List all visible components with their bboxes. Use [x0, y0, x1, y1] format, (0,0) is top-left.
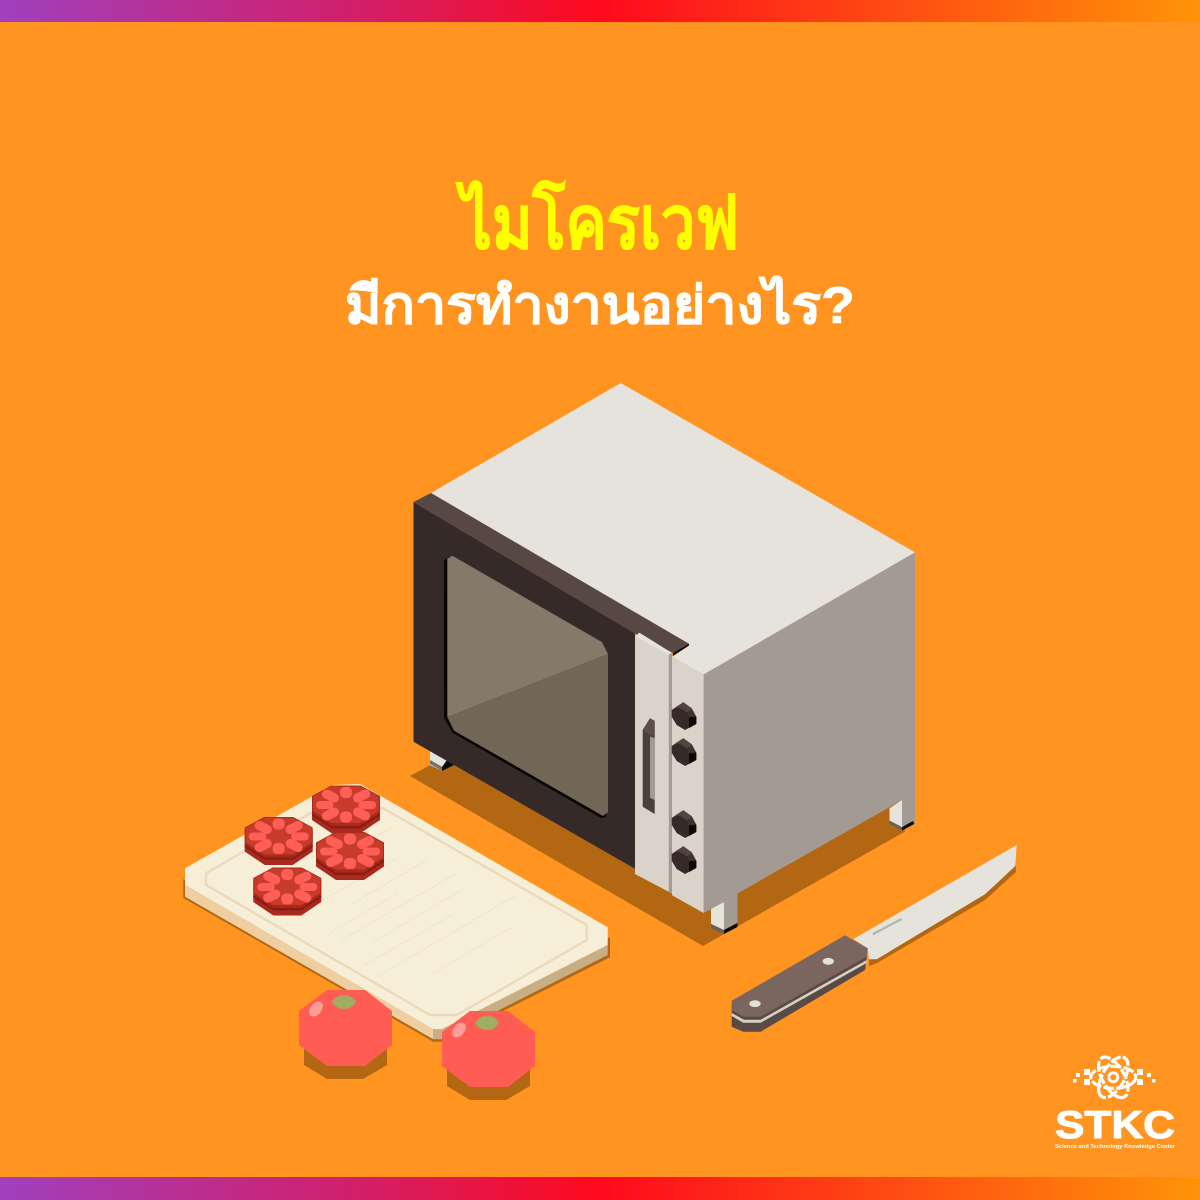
handle top [732, 935, 868, 1017]
slice 4 [253, 868, 321, 916]
board top [185, 784, 608, 1029]
knob 4 [672, 846, 696, 874]
handle lower side [732, 956, 867, 1032]
knob 2 [672, 738, 696, 766]
oven front dark frame [414, 502, 635, 869]
rivet 2 [749, 1000, 761, 1007]
STKC logo [1055, 1052, 1176, 1150]
board knife scratches [320, 827, 515, 976]
oven front foot [711, 893, 737, 934]
door edge [635, 633, 672, 894]
logo atom icon [1091, 1052, 1136, 1102]
tomato right [442, 1011, 535, 1100]
microwave oven [410, 383, 915, 946]
oven window [447, 556, 608, 816]
top gradient bar [0, 0, 1200, 22]
cutting board [183, 784, 610, 1042]
board shadow [183, 879, 610, 1042]
slice 3 [316, 832, 384, 880]
knife [732, 845, 1017, 1032]
blade shadow [869, 862, 1016, 966]
board left side [185, 885, 433, 1039]
oven top [431, 383, 915, 674]
blade [853, 845, 1017, 959]
control panel [672, 657, 704, 913]
oven side [704, 552, 915, 913]
window upper glass [447, 556, 608, 717]
tomato slices [245, 786, 384, 916]
board groove [206, 808, 587, 1015]
knob 3 [672, 810, 696, 838]
logo wordmark: STKC [1055, 1104, 1175, 1147]
title line 1: ไมโครเวฟ [455, 179, 739, 264]
bottom gradient bar [0, 1177, 1200, 1200]
title line 2: มีการทำงานอย่างไร? [345, 275, 855, 335]
oven floor shadow [410, 750, 905, 946]
knob 1 [672, 702, 696, 730]
dark band shadow sliver [673, 644, 689, 656]
oven right foot [890, 794, 915, 831]
oven left back foot [430, 750, 454, 771]
oven top dark band [414, 493, 689, 653]
board right side [433, 945, 608, 1039]
window lower glass [447, 654, 608, 816]
handle silver stripe [732, 960, 867, 1023]
logo tagline: Science and Technology Knowledge Center [1055, 1144, 1176, 1150]
door handle [643, 718, 655, 814]
rivet 1 [823, 958, 834, 965]
tomato left [299, 990, 392, 1079]
blade slot [872, 918, 902, 935]
slice 1 [312, 786, 380, 834]
logo pixel squares [1073, 1069, 1156, 1085]
slice 2 [245, 817, 313, 865]
title [345, 179, 855, 335]
oven window shadow edge [444, 557, 606, 818]
